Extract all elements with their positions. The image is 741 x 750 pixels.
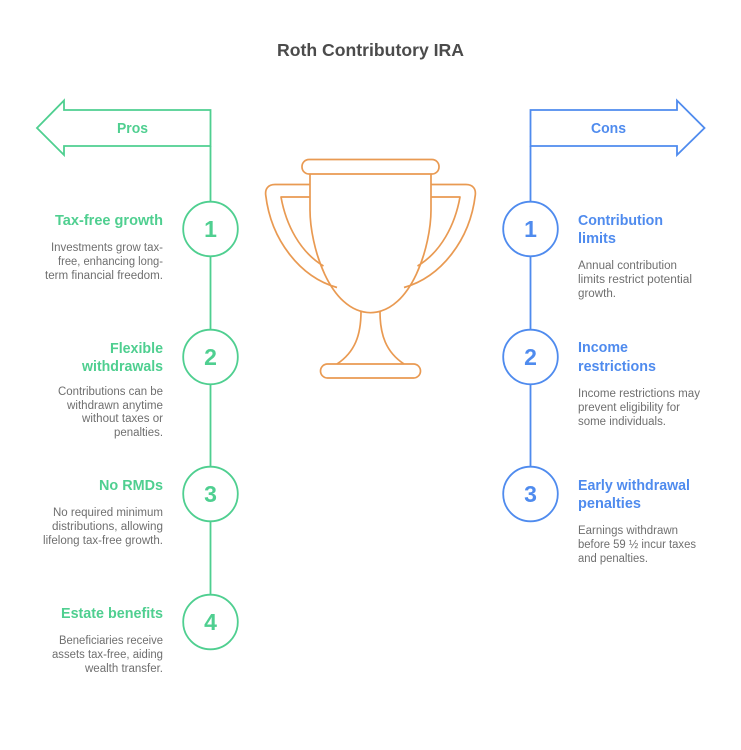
- description: assets tax-free, aiding: [52, 649, 163, 661]
- description: Income restrictions may: [578, 388, 700, 400]
- description: No required minimum: [53, 507, 163, 519]
- description: Annual contribution: [578, 260, 677, 272]
- badge 2: [503, 330, 558, 384]
- pros item 1: tax-free growth: [45, 202, 238, 282]
- heading: Income: [578, 340, 628, 356]
- description: penalties.: [114, 427, 163, 439]
- icon: trophy: [266, 160, 475, 378]
- badge 3: [503, 467, 558, 521]
- heading: [81, 341, 163, 375]
- description: [578, 260, 692, 300]
- timeline: cons connector: [530, 146, 532, 467]
- badge 1: [183, 202, 238, 256]
- description: Earnings withdrawn: [578, 525, 678, 537]
- heading: restrictions: [578, 359, 656, 375]
- description: Investments grow tax-: [51, 242, 163, 254]
- heading: No RMDs: [99, 478, 163, 494]
- badge 3: [183, 467, 238, 521]
- timeline: pros connector: [210, 146, 212, 595]
- heading: penalties: [578, 496, 641, 512]
- badge 4: 4: [204, 609, 217, 635]
- badge 2: [183, 330, 238, 384]
- badge 3: 3: [524, 481, 537, 507]
- description: free, enhancing long-: [58, 256, 163, 268]
- description: [58, 386, 163, 439]
- arrow: cons header: Cons: [591, 121, 626, 137]
- badge 1: 1: [204, 216, 217, 242]
- badge 3: 3: [204, 481, 217, 507]
- heading: Estate benefits: [61, 606, 163, 622]
- panel: cons: [503, 100, 704, 565]
- description: distributions, allowing: [52, 521, 163, 533]
- description: Beneficiaries receive: [59, 635, 163, 647]
- description: lifelong tax-free growth.: [43, 535, 163, 547]
- title: Roth Contributory IRA: [277, 40, 464, 60]
- heading: [578, 213, 663, 247]
- badge 1: [503, 202, 558, 256]
- description: before 59 ½ incur taxes: [578, 539, 696, 551]
- arrow: cons header: [530, 100, 704, 155]
- heading: [578, 340, 656, 375]
- badge 2: 2: [204, 344, 217, 370]
- description: term financial freedom.: [45, 270, 163, 282]
- heading: Tax-free growth: [55, 213, 163, 229]
- description: withdrawn anytime: [66, 400, 163, 412]
- heading: limits: [578, 231, 616, 247]
- heading: Contribution: [578, 213, 663, 229]
- description: [578, 388, 700, 428]
- description: growth.: [578, 288, 616, 300]
- pros item 3: no RMDs: [43, 467, 238, 547]
- description: Contributions can be: [58, 386, 163, 398]
- cons item 2: income restrictions: [503, 330, 700, 428]
- heading: withdrawals: [81, 359, 163, 375]
- description: some individuals.: [578, 416, 666, 428]
- cons item 3: early withdrawal penalties: [503, 467, 696, 565]
- description: [43, 507, 163, 547]
- badge 2: 2: [524, 344, 537, 370]
- panel: pros: [37, 100, 238, 675]
- description: [45, 242, 163, 282]
- description: prevent eligibility for: [578, 402, 680, 414]
- arrow: pros header: [37, 100, 210, 155]
- badge 1: 1: [524, 216, 537, 242]
- cons item 1: contribution limits: [503, 202, 692, 300]
- description: wealth transfer.: [84, 663, 163, 675]
- heading: [578, 478, 690, 512]
- description: and penalties.: [578, 553, 648, 565]
- description: [578, 525, 696, 565]
- description: [52, 635, 163, 675]
- pros item 4: estate benefits: [52, 595, 238, 675]
- pros item 2: flexible withdrawals: [58, 330, 238, 439]
- description: limits restrict potential: [578, 274, 692, 286]
- arrow: pros header: Pros: [117, 121, 148, 137]
- description: without taxes or: [81, 413, 163, 425]
- heading: Early withdrawal: [578, 478, 690, 494]
- heading: Flexible: [110, 341, 163, 357]
- badge 4: [183, 595, 238, 649]
